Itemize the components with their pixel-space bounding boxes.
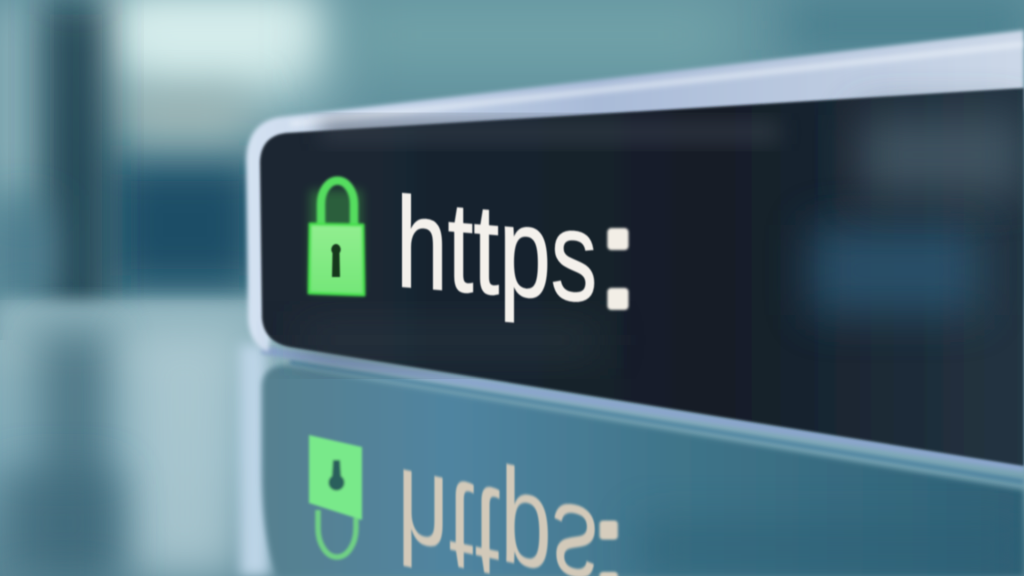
reflection of the bar on the glass surface bbox=[240, 345, 1024, 576]
icon: green padlock bbox=[309, 181, 364, 295]
pale left edge of the reflection bbox=[240, 345, 270, 576]
face reflections bbox=[810, 225, 980, 315]
light lower lip of the bar bbox=[262, 350, 1024, 468]
bar dark face bbox=[260, 88, 1024, 466]
colon: : bbox=[598, 179, 637, 336]
bright highlight along top edge bbox=[290, 44, 1024, 124]
reflected padlock bbox=[309, 435, 362, 557]
bar light edge bbox=[246, 30, 1024, 352]
dark band below the bar bbox=[290, 362, 1024, 482]
https text: https bbox=[396, 170, 597, 330]
address bar body bbox=[246, 30, 1024, 466]
